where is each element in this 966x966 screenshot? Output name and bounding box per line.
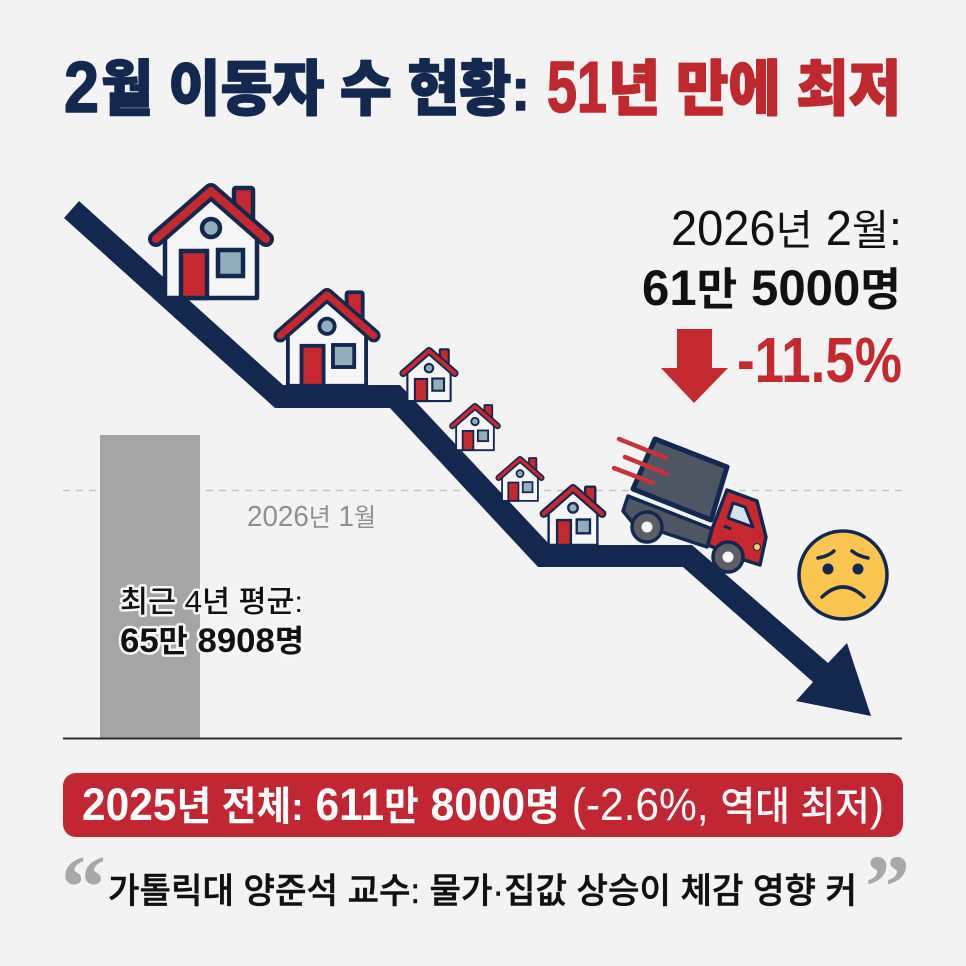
- callout: February 2026 value: [642, 202, 902, 316]
- truck chassis: [623, 496, 712, 547]
- callout: February 2026 value: 61만 5000명: [642, 260, 901, 316]
- front wheel: [713, 542, 743, 572]
- callout: percentage drop: -11.5%: [737, 324, 902, 396]
- title: 51: [547, 48, 607, 128]
- callout: February 2026 value: 2026년 2월:: [671, 202, 902, 256]
- icon: sad face: [799, 531, 887, 619]
- icon: medium house on landing: [544, 487, 602, 545]
- truck cab: [708, 490, 766, 565]
- title: 월 이동자 수 현황:: [101, 56, 530, 123]
- icon: small house three: [499, 458, 541, 501]
- title: 2: [64, 48, 99, 128]
- icon: second house: [280, 292, 374, 386]
- declining staircase arrow: [64, 201, 871, 716]
- banner: 2025 total: 2025년 전체: 611만 8000명 (-2.6%, 역대 최저): [82, 779, 884, 830]
- speed lines: [614, 439, 667, 483]
- icon: largest house: [156, 188, 266, 298]
- axis baseline: [63, 738, 902, 740]
- label: four-year average value: 65만 8908명: [120, 622, 304, 660]
- icon: moving truck: [614, 439, 766, 572]
- quote text: 가톨릭대 양준석 교수: 물가·집값 상승이 체감 영향 커: [108, 872, 857, 911]
- rear wheel: [632, 512, 662, 542]
- label: four-year average value: [120, 584, 304, 660]
- truck door handle: [724, 526, 731, 529]
- icon: small house two: [452, 405, 498, 450]
- label: January 2026: 2026년 1월: [247, 501, 376, 533]
- title: [64, 48, 901, 128]
- label: four-year average value: 최근 4년 평균:: [120, 584, 303, 619]
- title: 년 만에 최저: [608, 56, 901, 123]
- truck window: [728, 503, 753, 527]
- truck cargo box: [633, 439, 727, 520]
- icon: opening quote mark: “: [61, 838, 106, 937]
- icon: red down arrow: [661, 329, 728, 403]
- bar: recent four-year average: [100, 435, 200, 738]
- icon: closing quote mark: ”: [865, 838, 910, 937]
- dashed reference line: January 2026: [63, 490, 903, 492]
- truck headlight: [754, 544, 760, 550]
- icon: small house one: [403, 349, 455, 401]
